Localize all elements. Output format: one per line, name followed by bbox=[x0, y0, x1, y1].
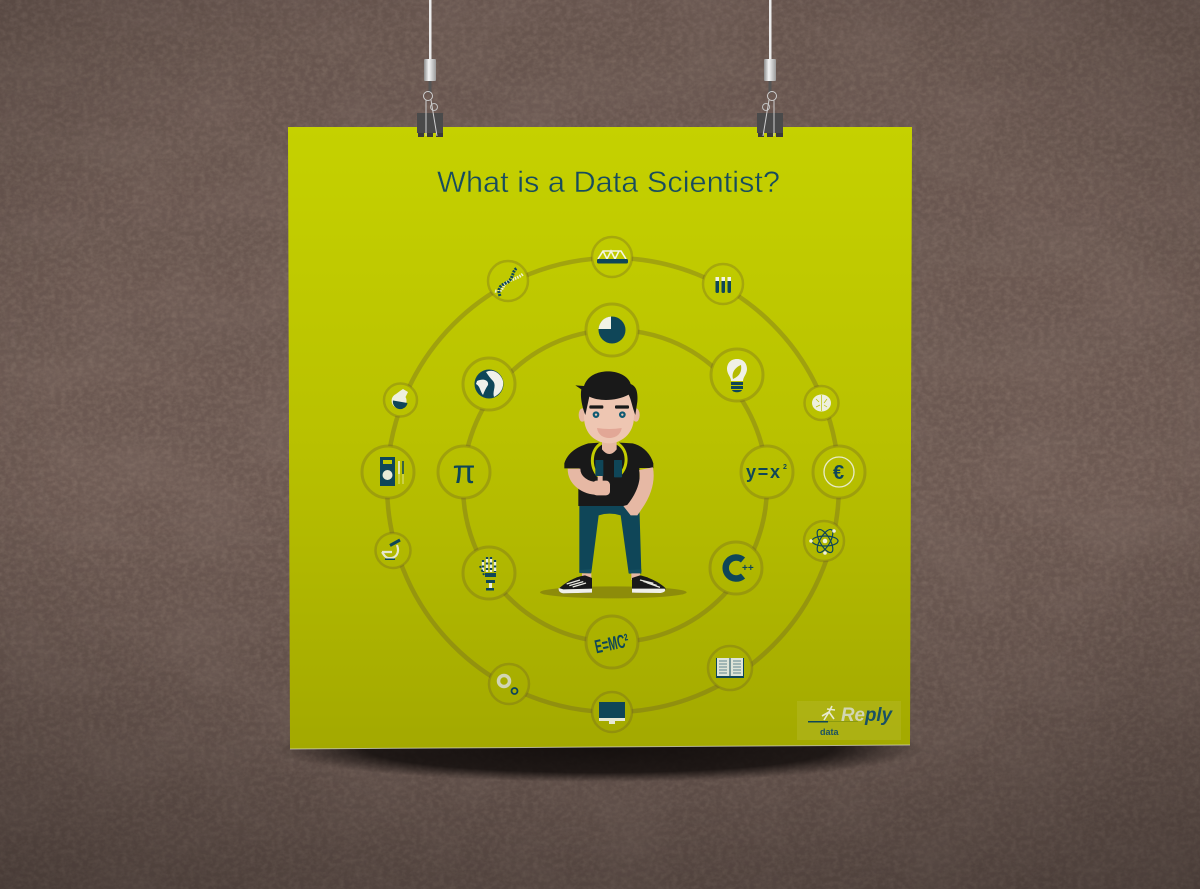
hanger: right wire and clip bbox=[757, 0, 783, 137]
poster shadow bbox=[275, 714, 925, 782]
title: What is a Data Scientist? bbox=[437, 166, 780, 199]
left arm and fist bbox=[574, 469, 610, 495]
icon: C++: ++ bbox=[742, 563, 754, 574]
head bbox=[584, 393, 634, 443]
hair bbox=[575, 371, 637, 415]
icon: robot hand bbox=[463, 547, 515, 599]
icon: E=MC2: E=MC² bbox=[593, 631, 631, 658]
icon: brain bbox=[804, 386, 838, 420]
icon: euro: € bbox=[833, 462, 844, 484]
eyes bbox=[593, 411, 599, 418]
icon: light bulb bbox=[711, 349, 763, 401]
icon: equation y = x squared: 2 bbox=[783, 464, 787, 471]
icon: microscope bbox=[376, 533, 410, 568]
inner ring bbox=[463, 330, 767, 642]
outer ring bbox=[387, 258, 839, 712]
icon: C++ bbox=[710, 542, 762, 594]
icon: equation y = x squared: y=x bbox=[746, 462, 780, 482]
logo: data Reply: Reply bbox=[841, 705, 893, 726]
icon: E=MC2 bbox=[586, 616, 638, 668]
shirt bbox=[564, 443, 653, 506]
shoes bbox=[559, 575, 592, 593]
icon: pi bbox=[438, 446, 490, 498]
icon: pi: π bbox=[453, 453, 475, 490]
eyebrows bbox=[589, 405, 603, 409]
character: data scientist bbox=[540, 371, 687, 598]
right arm and hand bbox=[623, 469, 647, 515]
icon: book bbox=[708, 646, 752, 690]
neck bbox=[602, 438, 617, 454]
icon: atom bbox=[804, 521, 844, 561]
icon: euro bbox=[813, 446, 865, 498]
ground shadow bbox=[540, 586, 687, 598]
icon: pie chart bbox=[586, 304, 638, 356]
mouth bbox=[597, 428, 622, 438]
icon: test tubes bbox=[703, 264, 743, 304]
icon: multimeter bbox=[362, 446, 414, 498]
poster panel bbox=[288, 127, 912, 749]
headphones cable bbox=[592, 443, 626, 476]
icon: monitor bbox=[592, 692, 632, 732]
icon: globe bbox=[463, 358, 515, 410]
ears bbox=[579, 408, 586, 422]
hanger: left wire and clip bbox=[417, 0, 443, 137]
icon: flask bbox=[384, 384, 417, 416]
icon: gears bbox=[489, 664, 529, 704]
icon: equation y = x squared bbox=[741, 446, 793, 498]
logo: data Reply: data bbox=[820, 727, 840, 737]
icon: bridge bbox=[592, 237, 632, 277]
logo: data Reply bbox=[797, 701, 901, 740]
icon: DNA bbox=[488, 261, 528, 301]
legs bbox=[579, 505, 641, 573]
